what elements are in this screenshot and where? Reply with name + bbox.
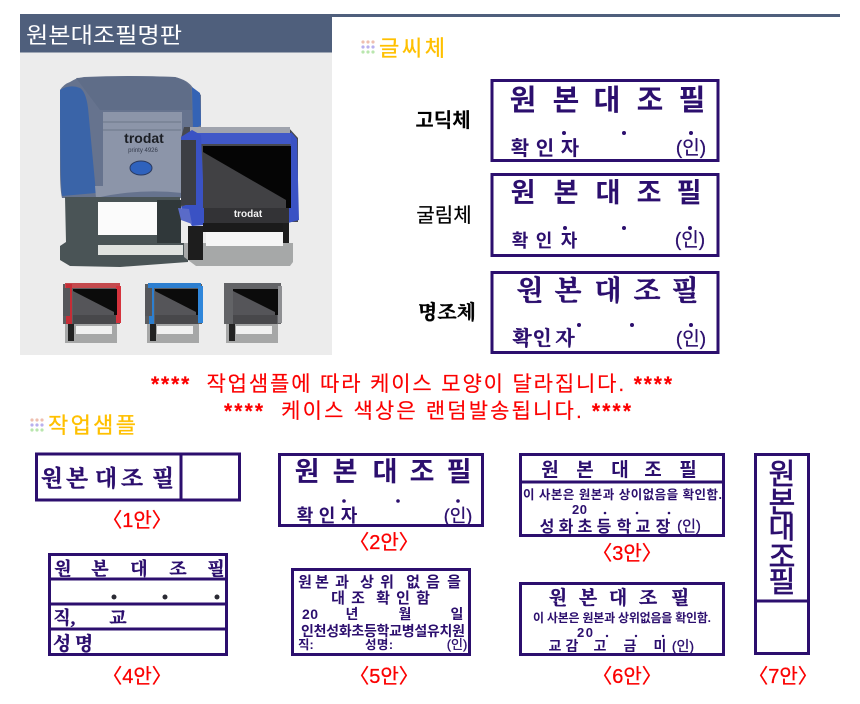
sample 2: 원본대조필 <box>295 457 471 487</box>
sample 3: 20 <box>572 502 587 517</box>
stamp: myeongjo sample: 확인자 <box>512 326 575 350</box>
sample 1: 원본대조필 <box>41 466 174 491</box>
stamp: gulim sample: (인) <box>675 229 705 251</box>
sample 6: 교감고금미 <box>549 638 666 654</box>
sample 3: 성화초등학교장 <box>540 518 671 536</box>
sample 5: 성명: <box>365 638 393 652</box>
panel: product photo <box>20 52 332 355</box>
sample 3: 이 사본은 원본과 상이없음을 확인함. <box>523 487 722 502</box>
sample 5: 20 <box>302 606 318 622</box>
top rule <box>332 14 840 17</box>
small blue stamp variant <box>145 283 203 343</box>
sample 4: 교 <box>109 608 127 628</box>
label: gothic: 고딕체 <box>415 109 471 132</box>
stamp: gothic sample: (인) <box>676 137 706 159</box>
large blue stamp <box>60 76 201 267</box>
notice: case colour: **** 케이스 색상은 랜덤발송됩니다. **** <box>224 400 632 423</box>
sample 6: (인) <box>672 638 694 654</box>
sample 6: 이 사본은 원본과 상위없음을 확인함. <box>533 610 711 625</box>
caption 7: 〈7안〉 <box>748 665 818 688</box>
small red stamp <box>63 283 121 343</box>
sample 4: 성명 <box>53 632 93 655</box>
sample 5 <box>292 570 470 654</box>
heading: work samples: 작업샘플 <box>48 413 136 438</box>
sample 6: 원본대조필 <box>549 586 689 609</box>
label: myeongjo: 명조체 <box>418 300 476 324</box>
sample 2: (인) <box>444 506 472 526</box>
sample 5: 대조확인함 <box>331 590 430 607</box>
small grey stamp <box>224 283 282 343</box>
sample 5: 직: <box>298 638 314 652</box>
sample 5: 인천성화초등학교병설유치원 <box>301 623 465 639</box>
stamp: gulim sample <box>492 174 718 256</box>
sample 1 <box>36 454 240 500</box>
sample 4: 원본대조필 <box>54 558 225 579</box>
sample 6 <box>520 584 724 654</box>
sample 7: 원본대조필 <box>769 459 795 599</box>
stamp: myeongjo sample: (인) <box>676 328 706 350</box>
sample 2 <box>280 454 482 526</box>
heading: typeface section: 글씨체 <box>379 36 445 61</box>
sample 3: (인) <box>677 518 701 535</box>
sample 5: (인) <box>447 637 467 652</box>
stamp: gulim sample: 확인자 <box>512 231 578 251</box>
sample 4 <box>49 554 227 655</box>
caption 1: 〈1안〉 <box>102 509 172 532</box>
header bar <box>20 14 332 52</box>
stamp: myeongjo sample <box>492 272 718 352</box>
stamp: gothic sample: 원본대조필 <box>510 84 705 117</box>
sample 6: 20 <box>577 625 593 640</box>
notice: case shape: **** 작업샘플에 따라 케이스 모양이 달라집니다. **** <box>151 373 673 396</box>
heading: product name: 원본대조필명판 <box>26 23 182 48</box>
stamp: myeongjo sample: 원본대조필 <box>516 275 699 307</box>
stamp: gulim sample: 원본대조필 <box>511 178 701 208</box>
sample 4: 직, <box>53 607 75 628</box>
caption 3: 〈3안〉 <box>592 542 662 565</box>
sample 5: 년월일 <box>346 606 463 622</box>
large blue stamp: trodat <box>124 130 164 146</box>
stamp: gothic sample <box>492 80 718 160</box>
small blue stamp <box>178 127 299 266</box>
sample 5: 원본과상위없음을 <box>298 574 461 591</box>
small blue stamp: trodat <box>234 209 263 220</box>
caption 5: 〈5안〉 <box>349 665 419 688</box>
sample 3 <box>520 454 724 536</box>
label: gulim: 굴림체 <box>416 204 472 227</box>
caption 6: 〈6안〉 <box>592 665 662 688</box>
stamp: gothic sample: 확인자 <box>511 137 579 160</box>
large blue stamp: printy 4926 <box>128 148 159 154</box>
sample 2: 확인자 <box>297 506 358 526</box>
sample 3: 원본대조필 <box>541 459 697 481</box>
caption 4: 〈4안〉 <box>102 665 172 688</box>
caption 2: 〈2안〉 <box>349 531 419 554</box>
sample 7 <box>755 454 809 654</box>
